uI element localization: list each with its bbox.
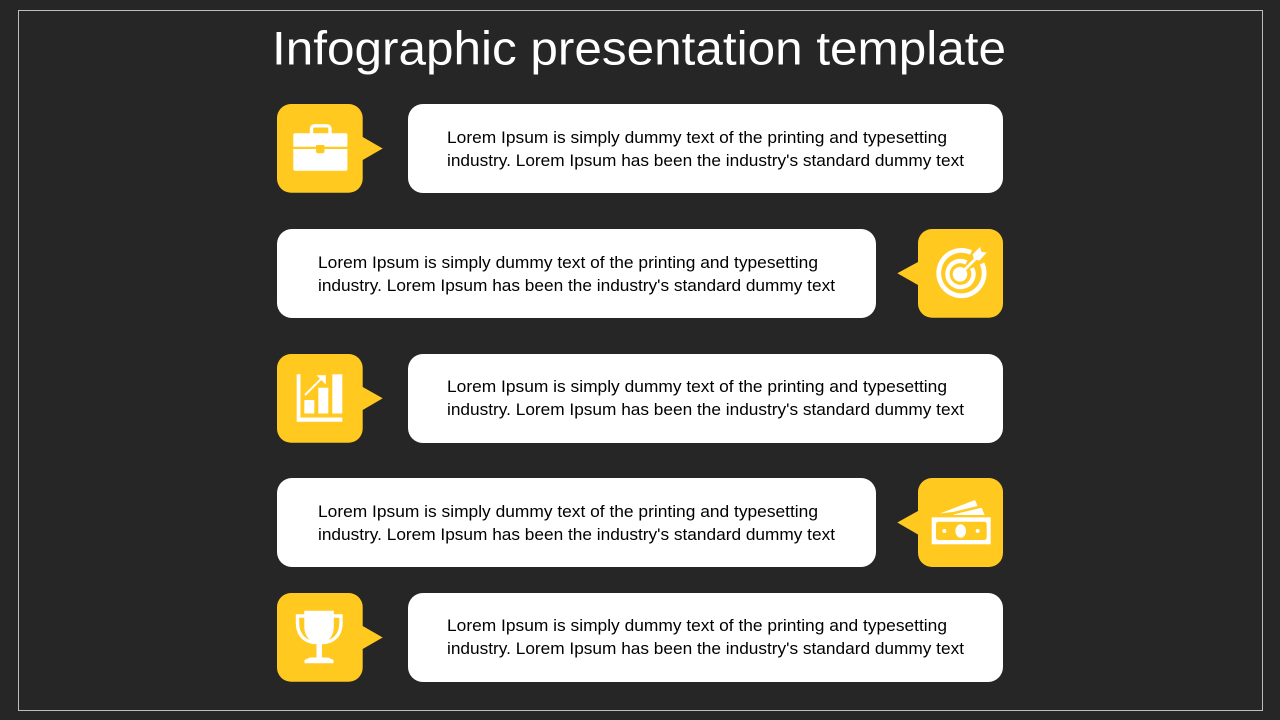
icon: banknotes xyxy=(932,500,991,544)
white text box 5 xyxy=(408,593,1003,682)
text block 5: industry. Lorem Ipsum has been the industry's standard dummy text xyxy=(447,639,964,658)
white text box 4 xyxy=(277,478,876,567)
text block 2: Lorem Ipsum is simply dummy text of the printing and typesetting xyxy=(318,253,818,272)
icon: bar chart with rising arrow xyxy=(297,374,342,422)
yellow callout: briefcase xyxy=(277,104,383,193)
title: Infographic presentation template xyxy=(272,22,1006,76)
yellow callout: trophy xyxy=(277,593,383,682)
icon: briefcase xyxy=(293,126,347,171)
text block 4: industry. Lorem Ipsum has been the industry's standard dummy text xyxy=(318,525,835,544)
white text box 2 xyxy=(277,229,876,318)
yellow callout: money xyxy=(897,478,1003,567)
text block 1: Lorem Ipsum is simply dummy text of the printing and typesetting xyxy=(447,128,947,147)
text block 1: industry. Lorem Ipsum has been the industry's standard dummy text xyxy=(447,151,964,170)
white text box 3 xyxy=(408,354,1003,443)
text block 2: industry. Lorem Ipsum has been the industry's standard dummy text xyxy=(318,276,835,295)
text block 3: industry. Lorem Ipsum has been the industry's standard dummy text xyxy=(447,400,964,419)
text block 5: Lorem Ipsum is simply dummy text of the printing and typesetting xyxy=(447,616,947,635)
yellow callout: chart xyxy=(277,354,383,443)
text block 4 xyxy=(318,502,835,544)
row 3: chart item xyxy=(277,354,1003,443)
row 1: briefcase item xyxy=(277,104,1003,193)
yellow callout: target xyxy=(897,229,1003,318)
text block 3 xyxy=(447,377,964,419)
row 2: target item xyxy=(277,229,1003,318)
row 5: trophy item xyxy=(277,593,1003,682)
text block 5 xyxy=(447,616,964,658)
text block 1 xyxy=(447,128,964,170)
row 4: money item xyxy=(277,478,1003,567)
icon: target with arrow xyxy=(939,247,987,296)
text block 2 xyxy=(318,253,835,295)
text block 4: Lorem Ipsum is simply dummy text of the printing and typesetting xyxy=(318,502,818,521)
white text box 1 xyxy=(408,104,1003,193)
text block 3: Lorem Ipsum is simply dummy text of the printing and typesetting xyxy=(447,377,947,396)
icon: trophy xyxy=(298,611,341,663)
